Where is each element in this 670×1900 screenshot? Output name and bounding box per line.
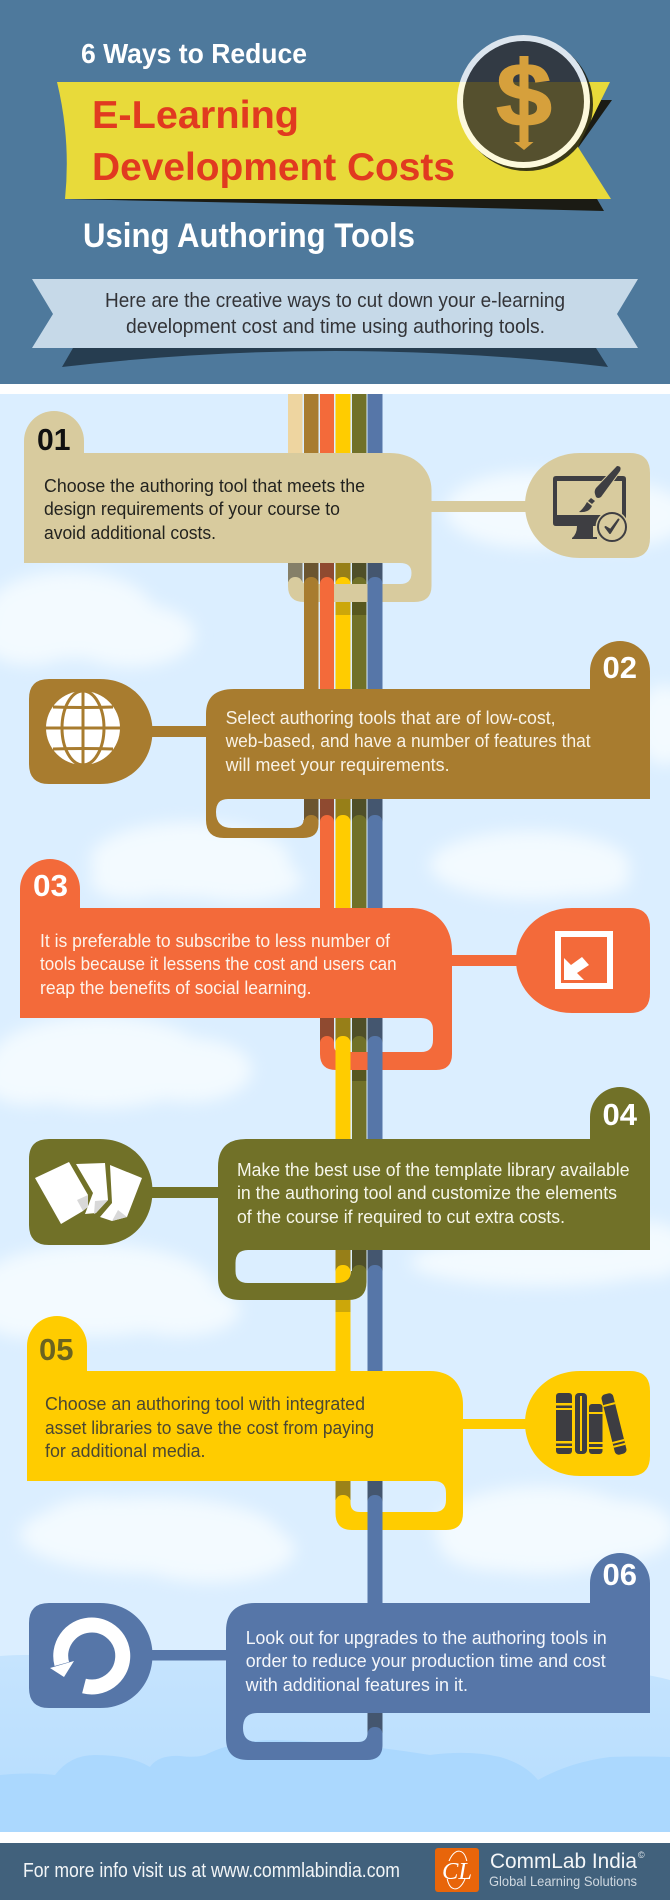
panel: step 04 (218, 1087, 650, 1315)
step 01 text: design requirements of your course to (44, 499, 340, 519)
intro ribbon (32, 279, 638, 348)
logo: CommLab India (435, 1848, 645, 1892)
heading: E-Learning Development Costs (92, 94, 455, 189)
connector 01 (431, 501, 527, 512)
coin icon: $ (496, 46, 552, 146)
step 06 text: with additional features in it. (245, 1675, 468, 1695)
panel: step 04: 04 (602, 1097, 638, 1132)
banner shadow (65, 100, 612, 211)
panel: step 05: 05 (39, 1332, 74, 1367)
panel: step 03: 03 (33, 868, 68, 903)
step 02 text (225, 708, 591, 775)
connector 05 (463, 1419, 527, 1429)
panel: step 02: 02 (602, 650, 637, 685)
icon: globe (29, 679, 152, 784)
subtitle: Using Authoring Tools: Using Authoring Tools (83, 217, 415, 255)
icon: refresh arrow (29, 1603, 152, 1708)
icon: resize arrow in square (516, 908, 650, 1013)
step 05 text: for additional media. (45, 1441, 206, 1461)
connector 04 (150, 1187, 218, 1198)
foreground cloud hill (0, 1740, 670, 1832)
step 06 text: order to reduce your production time and cost (246, 1651, 606, 1671)
base coloured strips (288, 394, 382, 1730)
step 04 text: in the authoring tool and customize the elements (237, 1183, 617, 1203)
step 05 text (45, 1394, 374, 1461)
yellow banner (57, 82, 611, 199)
panel: step 06 (226, 1553, 650, 1760)
step 03 text (40, 931, 397, 998)
panel: step 02 (206, 641, 650, 838)
step 02 text: web-based, and have a number of features that (225, 731, 591, 751)
panel: step 01: 01 (37, 422, 70, 457)
step 04 text (237, 1160, 630, 1227)
logo: CommLab India: Global Learning Solutions (489, 1873, 637, 1889)
sky background (0, 394, 670, 1832)
title: 6 Ways to Reduce: 6 Ways to Reduce (81, 38, 307, 69)
distant hill (0, 1655, 670, 1832)
icon: books (525, 1371, 650, 1476)
connector 06 (150, 1650, 226, 1660)
step 06 text (245, 1628, 607, 1695)
step 01 text: avoid additional costs. (44, 523, 216, 543)
step 05 text: asset libraries to save the cost from paying (45, 1418, 374, 1438)
step 03 text: reap the benefits of social learning. (40, 978, 312, 998)
panel: step 01 (24, 411, 432, 617)
ribbon shadow (62, 348, 608, 367)
heading: E-Learning Development Costs: Development Costs (92, 146, 455, 189)
footer link text: For more info visit us at www.commlabindia.com (23, 1860, 400, 1882)
intro ribbon: Here are the creative ways to cut down your e-learning (105, 290, 565, 312)
logo: CommLab India: CL (442, 1859, 472, 1885)
step 02 text: will meet your requirements. (225, 755, 450, 775)
panel: step 06: 06 (602, 1557, 637, 1592)
logo: CommLab India: © (638, 1850, 645, 1860)
panel: footer (0, 1843, 670, 1900)
panel: header background (0, 0, 670, 384)
step 01 text: Choose the authoring tool that meets the (44, 476, 365, 496)
intro ribbon: development cost and time using authoring tools. (126, 316, 545, 338)
panel: step 05 (27, 1316, 463, 1545)
step 04 text: Make the best use of the template library available (237, 1160, 630, 1180)
heading: E-Learning Development Costs: E-Learning (92, 94, 299, 137)
step 05 text: Choose an authoring tool with integrated (45, 1394, 365, 1414)
step 04 text: of the course if required to cut extra costs. (237, 1207, 565, 1227)
connector 02 (150, 726, 206, 737)
white separator above footer (0, 1832, 670, 1843)
icon: monitor with paintbrush (525, 453, 650, 558)
clouds (0, 472, 670, 1582)
icon: template pages (29, 1139, 152, 1245)
step 01 text (44, 476, 365, 543)
step 02 text: Select authoring tools that are of low-cost, (226, 708, 556, 728)
panel: step 03 (20, 859, 452, 1086)
step 03 text: tools because it lessens the cost and users can (40, 954, 397, 974)
coin icon (457, 35, 593, 171)
connector 03 (452, 955, 518, 966)
step 06 text: Look out for upgrades to the authoring tools in (246, 1628, 607, 1648)
step 03 text: It is preferable to subscribe to less number of (40, 931, 391, 951)
logo: CommLab India: CommLab India (490, 1850, 637, 1873)
